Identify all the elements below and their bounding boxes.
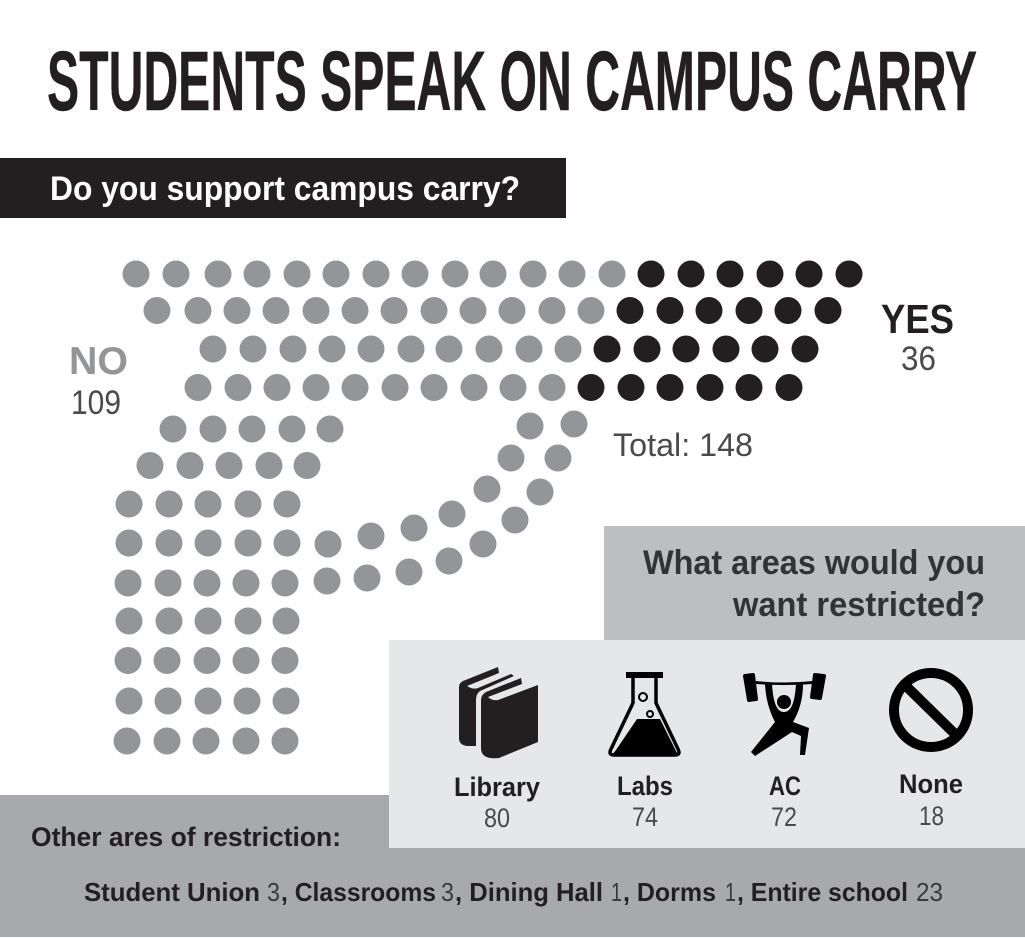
text: list of other restricted areas: 1: [611, 877, 622, 907]
icon: flask: [610, 672, 679, 755]
dot chart: pistol shape: [114, 260, 862, 754]
dots: no responses: [114, 260, 626, 754]
text: list of other restricted areas: Student Union: [84, 877, 260, 907]
text: list of other restricted areas: , Entire school: [737, 877, 908, 907]
heading bar: do you support campus carry: [0, 158, 566, 218]
label: no count: 109: [71, 384, 121, 422]
item: none: [894, 673, 968, 831]
text: list of other restricted areas: , Dining Hall: [455, 877, 603, 907]
label: yes count: [881, 296, 954, 378]
text: list of other restricted areas: [84, 877, 943, 907]
icon: weightlifter: [743, 673, 826, 756]
dots: yes responses: [578, 260, 862, 401]
bottom band: other areas of restriction: Other ares of restriction:: [31, 822, 341, 852]
item: library: 80: [484, 803, 510, 833]
bottom band: other areas of restriction: [0, 795, 1025, 937]
panel: restricted areas: [389, 640, 1025, 848]
item: ac: AC: [769, 771, 801, 801]
item: labs: [610, 672, 679, 832]
heading bar: do you support campus carry: Do you support campus carry?: [50, 170, 520, 208]
item: ac: [743, 673, 826, 832]
icon: prohibition sign: [894, 673, 968, 747]
item: none: None: [899, 769, 963, 799]
item: library: Library: [454, 772, 540, 802]
text: list of other restricted areas: 1: [725, 877, 736, 907]
item: library: [454, 667, 540, 833]
item: none: 18: [919, 801, 944, 831]
icon: books: [459, 667, 538, 758]
panel heading: what areas would you want restricted: want restricted?: [732, 586, 985, 624]
item: labs: 74: [632, 802, 658, 832]
text: list of other restricted areas: 3: [267, 877, 280, 907]
label: total: Total: 148: [613, 427, 753, 463]
panel heading: what areas would you want restricted: What areas would you: [643, 544, 985, 582]
label: no count: [69, 340, 128, 422]
label: yes count: 36: [901, 340, 936, 378]
label: no count: NO: [69, 340, 128, 383]
panel heading: what areas would you want restricted: [604, 526, 1025, 640]
text: list of other restricted areas: , Dorms: [623, 877, 716, 907]
label: yes count: YES: [881, 296, 954, 342]
text: list of other restricted areas: , Classrooms: [281, 877, 436, 907]
item: labs: Labs: [617, 771, 673, 801]
item: ac: 72: [771, 802, 797, 832]
text: list of other restricted areas: 23: [916, 877, 943, 907]
text: list of other restricted areas: 3: [441, 877, 454, 907]
